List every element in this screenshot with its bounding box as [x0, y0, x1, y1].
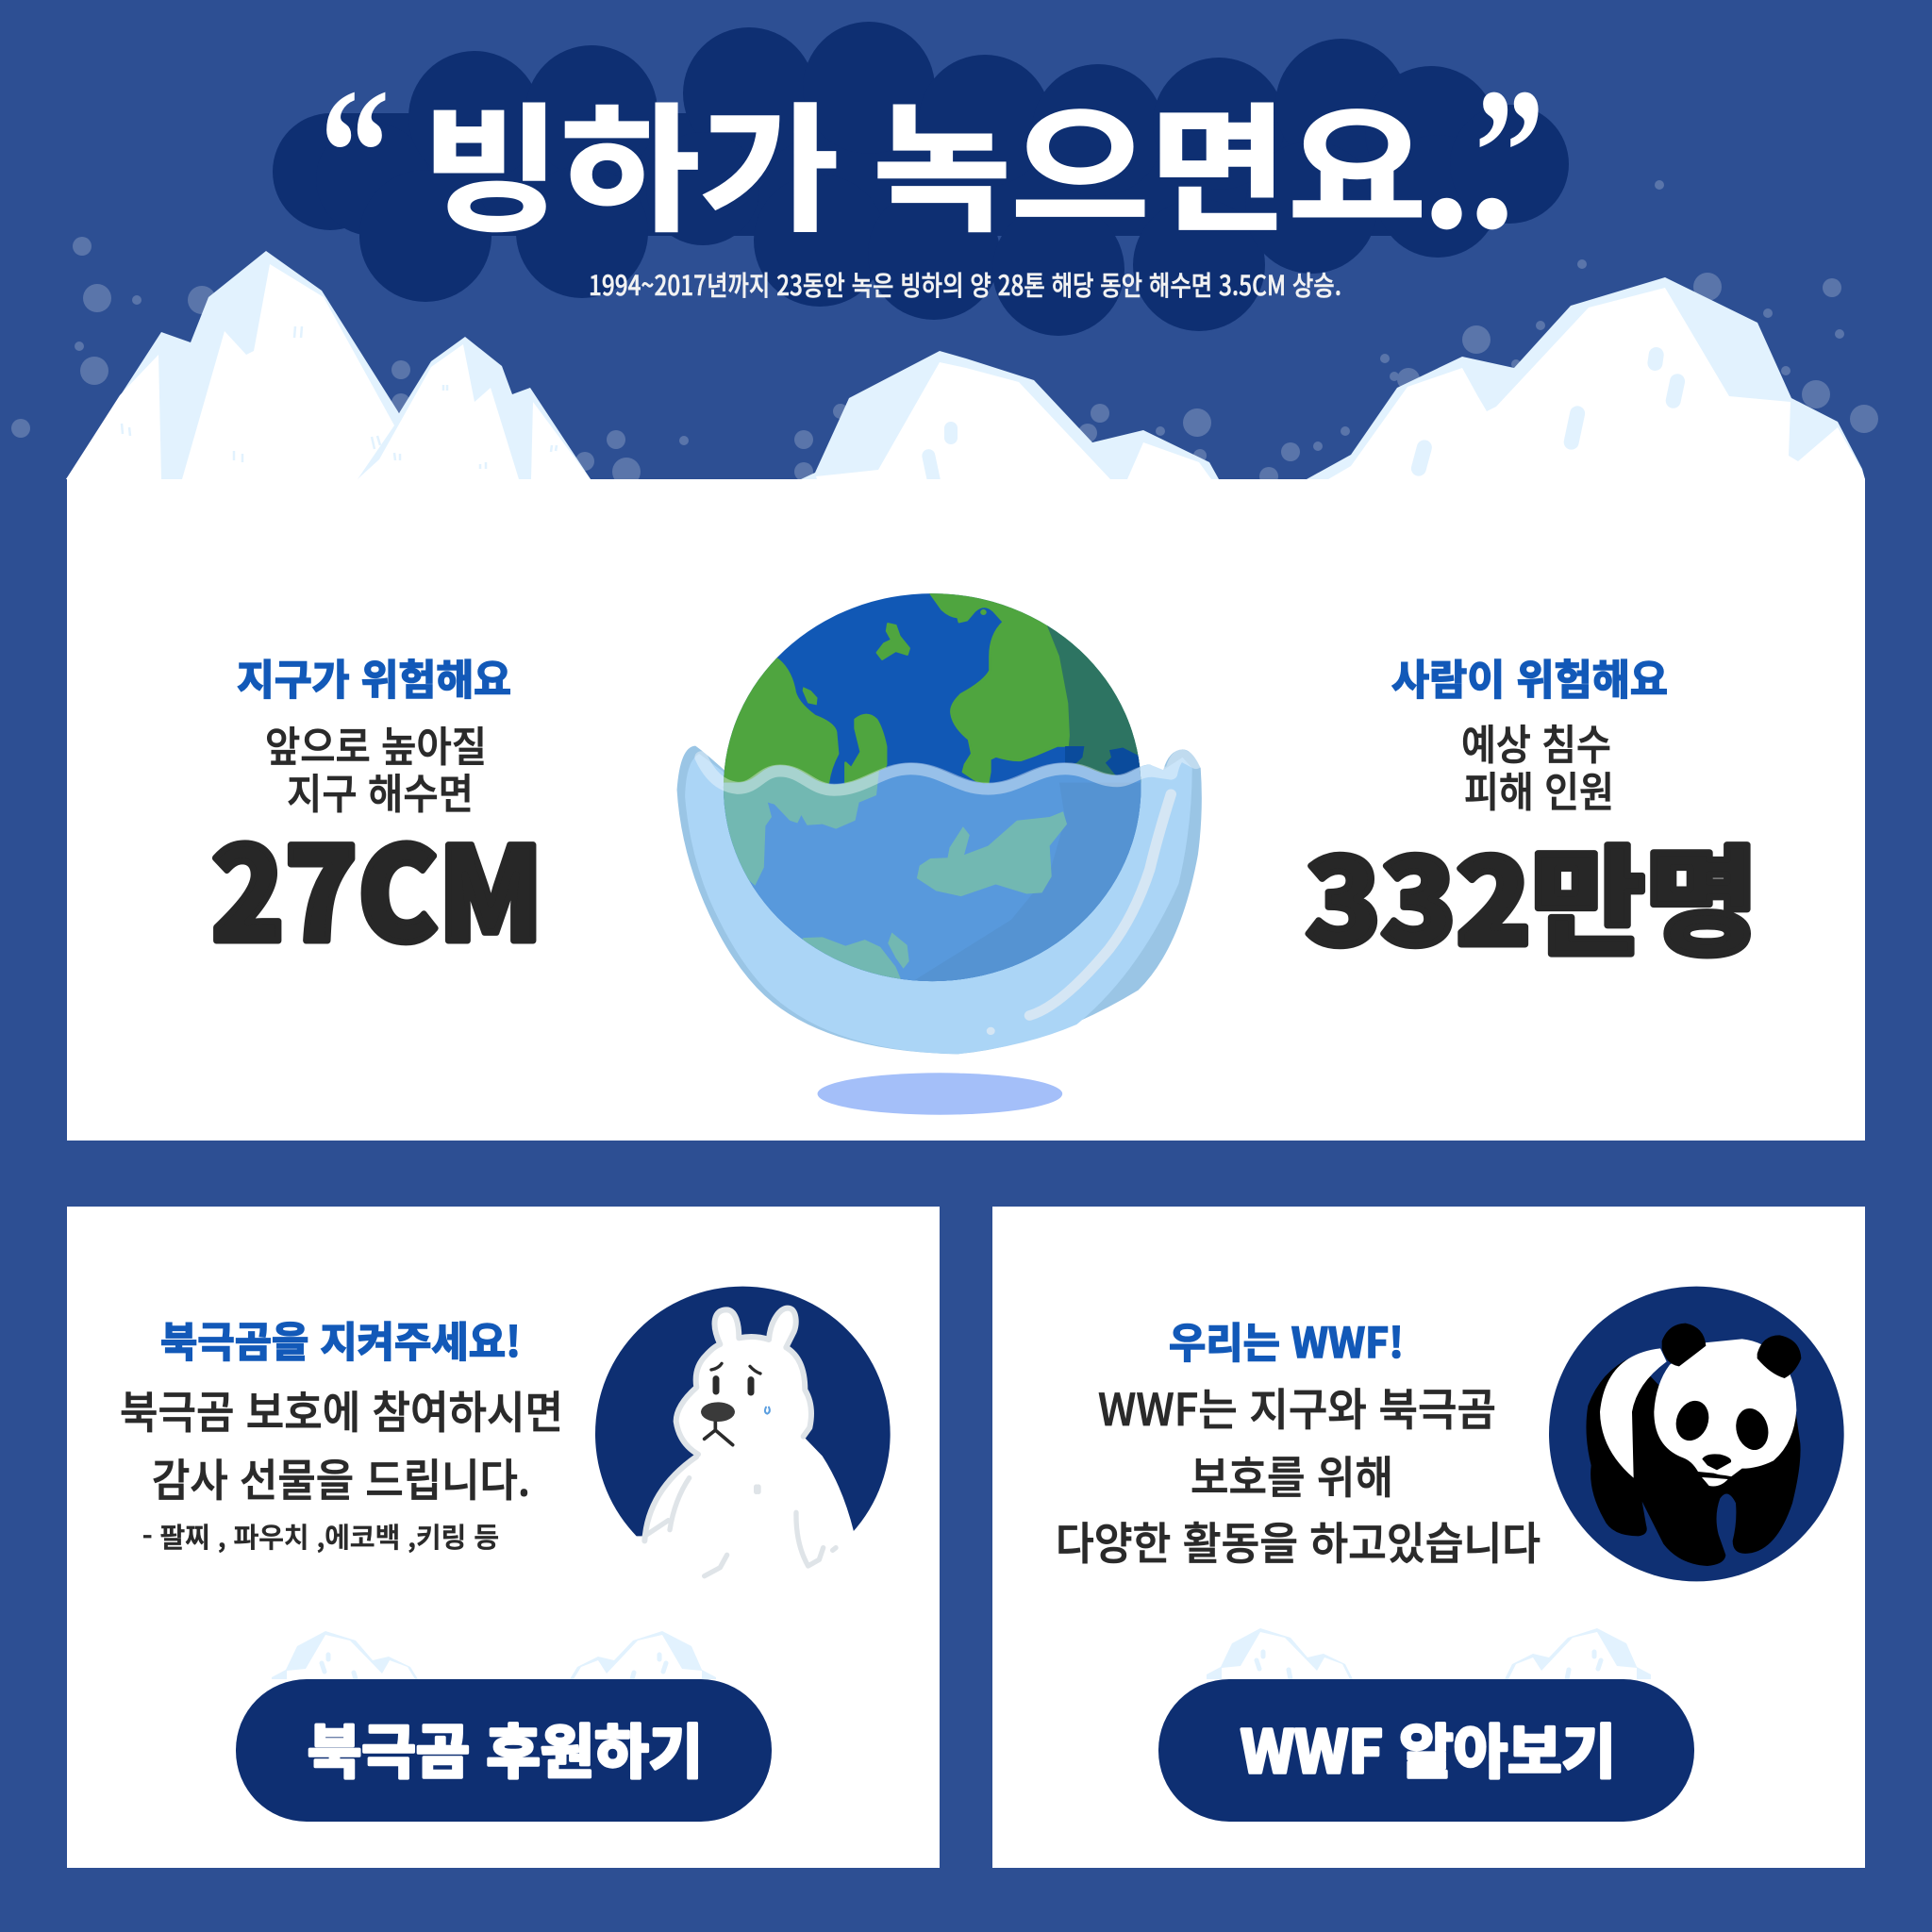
panda nose and mouth	[1702, 1454, 1731, 1470]
heading: earth in danger: 지구가 위험해요	[237, 646, 511, 707]
text: rising sea level: 지구 해수면	[287, 760, 474, 821]
panel: top	[67, 479, 1865, 1141]
icon: WWF panda	[1549, 1287, 1844, 1581]
bowl highlight	[1029, 794, 1171, 1015]
panel: WWF	[992, 1207, 1865, 1868]
title word 2: 녹으면요	[873, 60, 1426, 259]
navy circle	[1549, 1287, 1844, 1581]
heading: people in danger: 사람이 위험해요	[1391, 646, 1668, 707]
text: rising sea level	[265, 713, 487, 821]
bear face	[701, 1363, 770, 1445]
bear outline	[644, 1308, 811, 1541]
text: WWF description: 다양한 활동을 하고있습니다	[1056, 1507, 1541, 1573]
iceberg: middle	[801, 351, 1219, 488]
bear arms	[644, 1478, 836, 1576]
title	[320, 36, 1544, 275]
text: WWF description: WWF는 지구와 북극곰	[1098, 1374, 1496, 1439]
subtitle: 1994~2017년까지 23동안 녹은 빙하의 양 28톤 해당 동안 해수면 3.5CM 상승.	[589, 264, 1341, 304]
button: learn about WWF	[1158, 1679, 1694, 1822]
submerged part of earth	[724, 763, 1141, 981]
button: sponsor polar bear	[236, 1679, 772, 1822]
text: rising sea level: 앞으로 높아질	[265, 713, 487, 774]
text: flood victims: 예상 침수	[1461, 711, 1611, 772]
water bowl	[677, 746, 1202, 1054]
iceberg: right	[1307, 277, 1865, 479]
opening quote: “	[320, 53, 390, 254]
icon: polar bear	[595, 1287, 891, 1582]
panda body	[1586, 1357, 1801, 1566]
snow bubbles	[11, 180, 1878, 486]
panda eyes	[1671, 1396, 1714, 1445]
text: WWF description: 보호를 위해	[1191, 1441, 1393, 1507]
closing quote: ”	[1474, 53, 1544, 254]
panda back	[1600, 1348, 1667, 1478]
earth	[719, 588, 1146, 985]
title cloud	[273, 22, 1569, 336]
button backdrop: small icebergs	[272, 1631, 716, 1679]
water shadow	[818, 1073, 1062, 1115]
heading: we are WWF: 우리는 WWF!	[1169, 1309, 1404, 1370]
button: learn about WWF: WWF 알아보기	[1241, 1705, 1616, 1790]
title word 1: 빙하가	[422, 60, 839, 259]
button backdrop: small icebergs	[1207, 1628, 1651, 1679]
text: flood victims	[1461, 711, 1614, 819]
dark ocean patches	[1065, 746, 1085, 764]
illustration: earth in melting water	[677, 588, 1202, 1115]
text: gift offer	[120, 1376, 563, 1509]
icebergs	[66, 251, 1865, 488]
text: WWF description	[1056, 1374, 1541, 1573]
bear body	[623, 1308, 880, 1582]
small island	[803, 687, 818, 705]
panda head	[1654, 1339, 1796, 1478]
water surface highlight	[701, 756, 1196, 790]
text: gift offer: 감사 선물을 드립니다.	[152, 1444, 530, 1509]
stat: 27CM: 27CM	[211, 792, 543, 978]
panda ears	[1662, 1324, 1801, 1378]
iceberg: left	[66, 251, 591, 479]
text: gift list: - 팔찌 , 파우치 ,에코백 ,키링 등	[142, 1516, 499, 1556]
text: gift offer: 북극곰 보호에 참여하시면	[120, 1376, 563, 1441]
text: flood victims: 피해 인원	[1464, 758, 1614, 819]
night shade	[1047, 625, 1141, 783]
panel: polar bear	[67, 1207, 940, 1868]
title ellipsis: ..	[1420, 36, 1510, 275]
button: sponsor polar bear: 북극곰 후원하기	[308, 1705, 703, 1790]
heading: protect polar bears: 북극곰을 지켜주세요!	[160, 1308, 521, 1369]
navy circle	[595, 1287, 891, 1536]
stat: 3.32 million people: 332만명	[1306, 808, 1758, 978]
land masses above water	[719, 588, 1146, 783]
